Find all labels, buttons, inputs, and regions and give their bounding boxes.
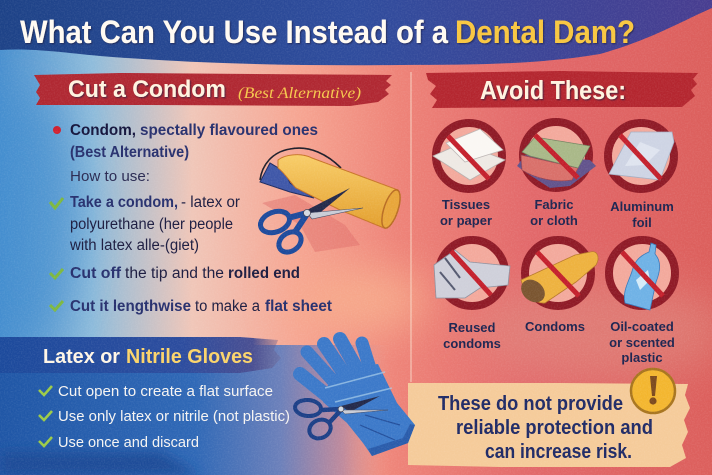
panel: avoid these bbox=[426, 71, 698, 365]
icon: reused condoms crossed out bbox=[434, 240, 510, 306]
label: aluminum foil bbox=[610, 199, 674, 230]
heading band: cut a condom: (Best Alternative) bbox=[238, 85, 361, 102]
icon: tissues crossed out bbox=[433, 123, 505, 189]
illustration: blue glove and scissors bbox=[294, 339, 415, 456]
step: cut off: rolled end bbox=[228, 265, 300, 282]
step: take a condom: polyurethane (her people bbox=[70, 216, 233, 233]
step: cut lengthwise: Cut it lengthwise bbox=[70, 298, 191, 315]
bullet: condom intro: spectally flavoured ones bbox=[140, 122, 318, 139]
bullet: condom intro bbox=[53, 122, 318, 161]
callout text: can increase risk. bbox=[485, 440, 632, 463]
text: how to use: How to use: bbox=[70, 168, 150, 185]
step: cut lengthwise bbox=[50, 298, 332, 315]
step: take a condom bbox=[50, 194, 240, 254]
step: cut off: the tip and the bbox=[125, 265, 224, 282]
icon: warning bbox=[631, 369, 675, 413]
illustration: cut condom and scissors bbox=[257, 148, 404, 256]
label: oil-coated plastic: Oil-coated bbox=[610, 319, 674, 334]
label: tissues: or paper bbox=[440, 213, 492, 228]
heading band: avoid these bbox=[426, 71, 698, 108]
header banner bbox=[0, 0, 712, 65]
panel: cut a condom bbox=[34, 73, 404, 315]
bullet: condom intro: Condom, bbox=[70, 122, 136, 139]
bullet: condom intro: (Best Alternative) bbox=[70, 144, 189, 161]
heading band: cut a condom: Cut a Condom bbox=[68, 76, 226, 103]
heading band: gloves: Latex or bbox=[43, 346, 120, 368]
label: aluminum foil: Aluminum bbox=[610, 199, 674, 214]
label: fabric: or cloth bbox=[530, 213, 578, 228]
gloves checklist: Use once and discard bbox=[58, 435, 199, 451]
label: reused condoms: Reused bbox=[449, 320, 496, 335]
scissors bbox=[257, 188, 363, 256]
label: fabric: Fabric bbox=[534, 197, 574, 212]
label: aluminum foil: foil bbox=[632, 215, 652, 230]
label: tissues bbox=[440, 197, 492, 228]
heading band: gloves: Nitrile Gloves bbox=[126, 346, 253, 368]
icon: fabric crossed out bbox=[517, 122, 596, 188]
icon: plastic bottle crossed out bbox=[609, 240, 675, 310]
step: take a condom: with latex alle-(giet) bbox=[69, 237, 199, 254]
step: cut lengthwise: to make a bbox=[195, 298, 260, 315]
label: condoms: Condoms bbox=[525, 319, 585, 334]
title: Dental Dam? bbox=[455, 14, 635, 50]
callout text bbox=[438, 392, 653, 463]
step: take a condom: Take a condom, bbox=[70, 194, 178, 211]
step: take a condom: - latex or bbox=[181, 194, 240, 211]
callout text: These do not provide bbox=[438, 392, 623, 415]
label: tissues: Tissues bbox=[442, 197, 490, 212]
label: oil-coated plastic: plastic bbox=[621, 350, 663, 365]
gloves checklist: Use only latex or nitrile (not plastic) bbox=[58, 409, 290, 425]
step: cut lengthwise: flat sheet bbox=[265, 298, 332, 315]
gloves scissors bbox=[294, 396, 388, 442]
icon: aluminum foil crossed out bbox=[608, 123, 674, 189]
callout: warning bbox=[408, 369, 690, 467]
label: oil-coated plastic: or scented bbox=[609, 335, 675, 350]
label: fabric bbox=[530, 197, 578, 228]
callout text: reliable protection and bbox=[456, 416, 653, 439]
label: reused condoms bbox=[443, 320, 501, 351]
icon: condoms crossed out bbox=[517, 240, 598, 307]
gloves checklist bbox=[39, 384, 290, 451]
heading band: avoid these: Avoid These: bbox=[480, 75, 626, 105]
heading band: cut a condom bbox=[34, 73, 392, 106]
step: cut off bbox=[50, 265, 300, 282]
label: oil-coated plastic bbox=[609, 319, 675, 365]
label: reused condoms: condoms bbox=[443, 336, 501, 351]
panel: gloves bbox=[0, 337, 290, 451]
gloves checklist: Cut open to create a flat surface bbox=[58, 384, 273, 400]
heading band: gloves bbox=[0, 337, 281, 373]
step: cut off: Cut off bbox=[70, 265, 122, 282]
title: What Can You Use Instead of a bbox=[20, 14, 448, 50]
